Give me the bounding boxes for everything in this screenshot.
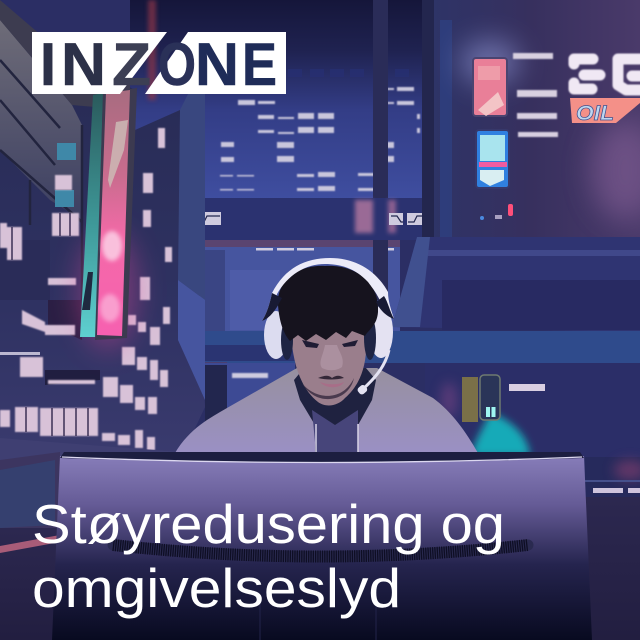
person with headset bbox=[175, 258, 478, 453]
logo background streak bbox=[148, 0, 156, 100]
title: Støyredusering og bbox=[32, 493, 505, 555]
logo right plate bbox=[145, 32, 286, 94]
logo lettering bbox=[40, 31, 277, 98]
lower wall, lamp with teal glow bbox=[205, 363, 640, 457]
monitor stand seams bbox=[260, 600, 376, 640]
title: omgivelseslyd bbox=[32, 557, 401, 619]
lower blue wall behind person bbox=[185, 238, 400, 338]
central tower with lit windows bbox=[130, 0, 430, 200]
right building with upper floors bbox=[422, 0, 640, 240]
monitor bbox=[52, 452, 592, 640]
monitor air vent bbox=[113, 545, 528, 556]
logo lettering: N bbox=[195, 31, 239, 98]
right ground with railings bbox=[583, 457, 640, 640]
logo lettering: Z bbox=[112, 31, 151, 98]
hair bbox=[278, 266, 378, 341]
horizontal sky bridge with lights bbox=[172, 198, 432, 240]
facial features bbox=[302, 340, 358, 399]
jacket bbox=[175, 368, 478, 453]
left ground bbox=[0, 452, 60, 640]
earcups bbox=[264, 306, 393, 360]
logo left plate bbox=[32, 32, 167, 94]
right roof and beam structure bbox=[175, 237, 640, 368]
logo lettering: E bbox=[242, 31, 277, 98]
logo bbox=[32, 31, 286, 98]
headband dark sliders bbox=[262, 293, 394, 321]
dark vertical pillar bbox=[373, 0, 388, 300]
title bbox=[32, 493, 505, 619]
logo lettering: I bbox=[40, 31, 56, 98]
neon signs bbox=[460, 40, 640, 188]
logo lettering: O bbox=[158, 31, 196, 98]
headband bbox=[262, 258, 394, 321]
left apartment building bbox=[0, 0, 205, 500]
microphone boom bbox=[362, 350, 389, 390]
neck and face bbox=[291, 328, 366, 405]
t-shirt and collar bbox=[294, 368, 376, 453]
logo lettering: N bbox=[61, 31, 106, 98]
pink neon vertical sign bbox=[78, 88, 138, 350]
neon signs: OIL bbox=[576, 102, 614, 125]
